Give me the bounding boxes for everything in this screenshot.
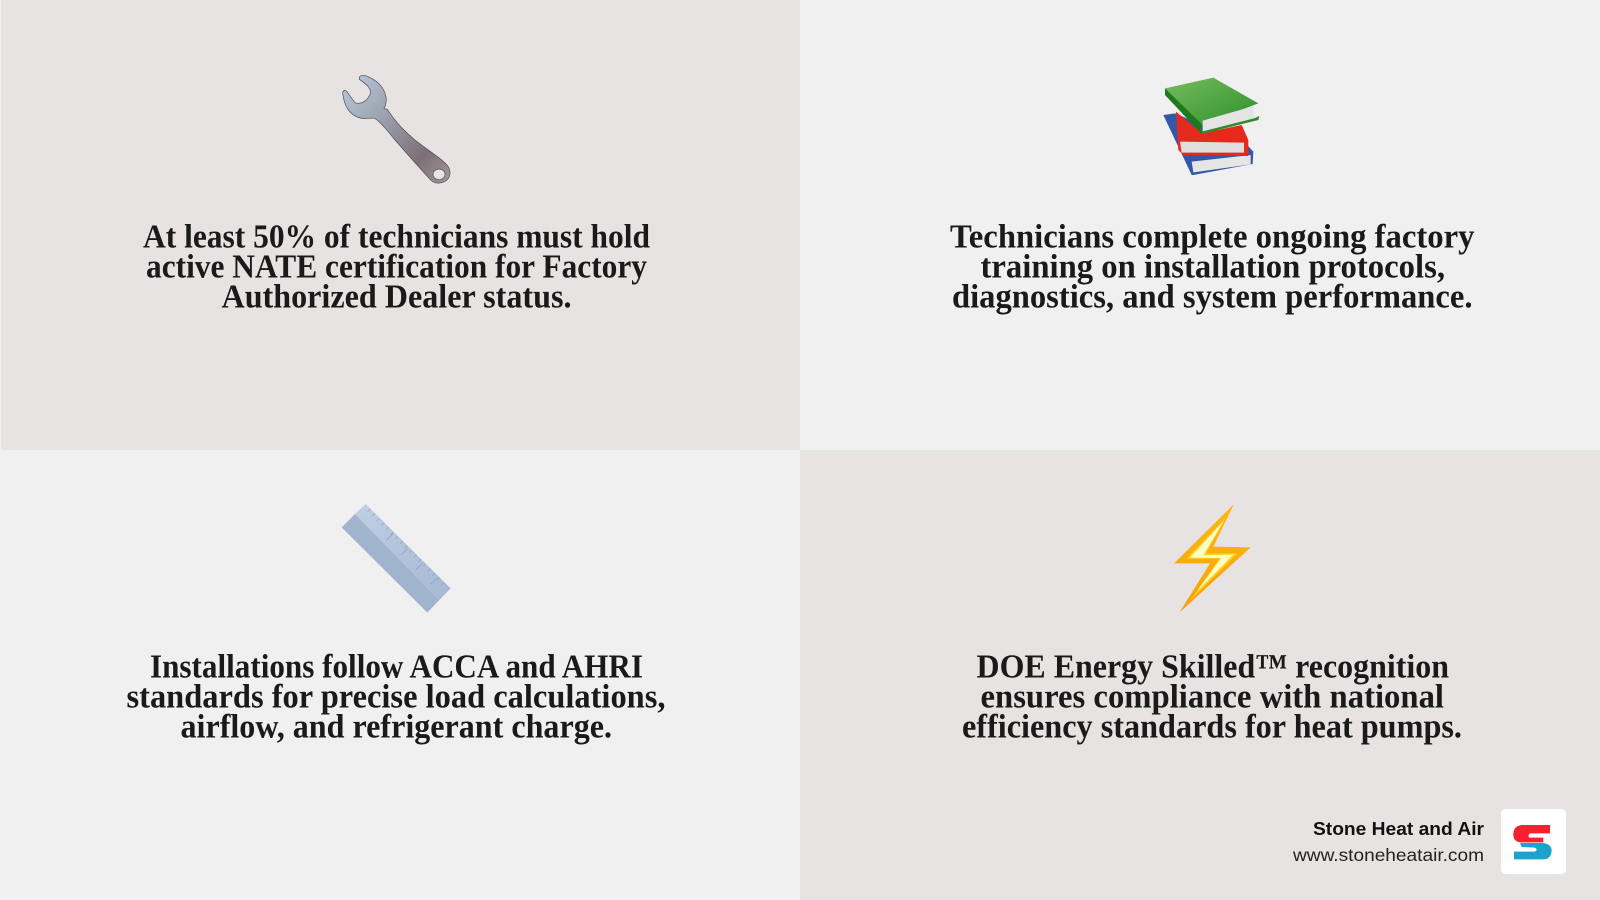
logo [1501,809,1566,874]
text: DOE recognition: efficiency standards for heat pumps. [962,708,1462,746]
website: www.stoneheatair.com [1292,845,1484,865]
text: DOE recognition: DOE Energy Skilled™ recognition [976,648,1449,686]
text: factory training: training on installation protocols, [980,248,1445,286]
text: installation standards: airflow, and refrigerant charge. [180,708,612,746]
text: installation standards: standards for precise load calculations, [126,678,666,716]
text: DOE recognition: ensures compliance with national [980,678,1444,716]
icon: ruler [342,504,451,613]
panel: DOE recognition [800,450,1600,900]
panel: installation standards [1,450,800,900]
icon: lightning bolt [1174,504,1251,613]
text: installation standards [126,648,666,746]
text: factory training: diagnostics, and system performance. [952,278,1472,316]
text: NATE certification: At least 50% of technicians must hold [143,218,650,256]
panel: factory training [800,0,1600,450]
text: NATE certification: active NATE certification for Factory [146,248,647,286]
text: installation standards: Installations follow ACCA and AHRI [150,648,643,686]
brand name: Stone Heat and Air [1313,819,1484,839]
text: factory training: Technicians complete ongoing factory [950,218,1474,256]
icon: wrench [343,75,450,183]
text: factory training [950,218,1474,316]
icon: books [1163,78,1259,175]
text: NATE certification [143,218,650,316]
text: DOE recognition [962,648,1462,746]
text: NATE certification: Authorized Dealer status. [222,278,572,316]
panel: NATE certification [1,0,800,450]
